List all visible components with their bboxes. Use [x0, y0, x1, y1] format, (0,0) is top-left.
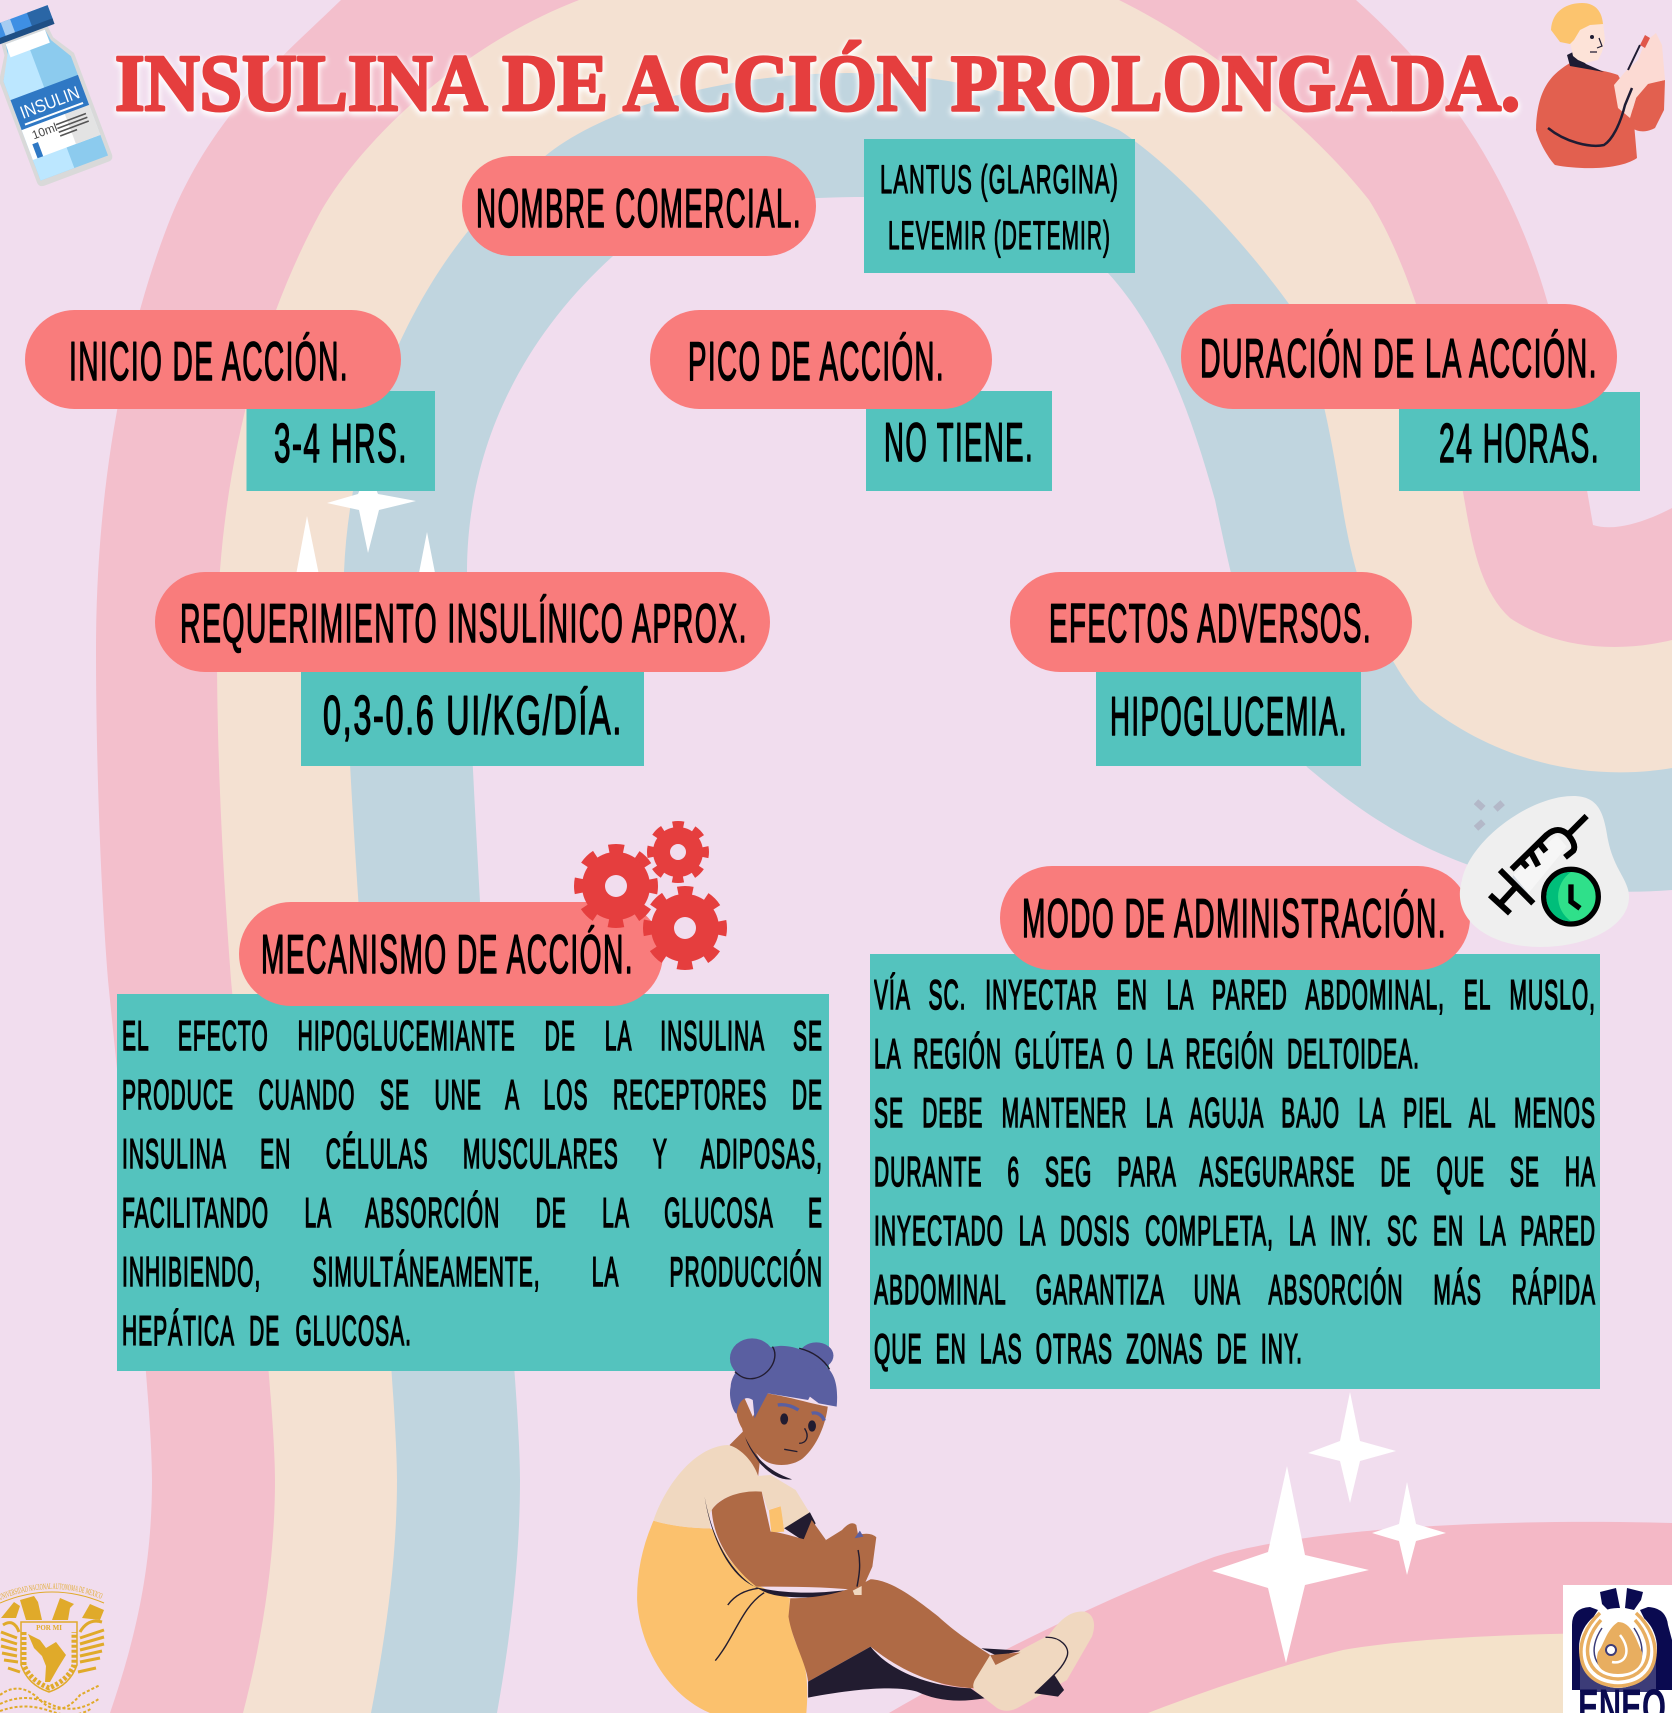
icon: insulin vial: 10ml	[30, 120, 59, 142]
text block: modo	[874, 960, 1604, 1384]
text block: mecanismo: FACILITANDO LA ABSORCIÓN DE LA GLUCOSA E	[122, 1189, 823, 1236]
panel: inicio de acción	[25, 310, 435, 491]
panel: modo de administración	[870, 866, 1604, 1389]
sparkles lower right	[1212, 1392, 1446, 1663]
text block: modo: QUE EN LAS OTRAS ZONAS DE INY.	[874, 1325, 1303, 1372]
text block: modo: INYECTADO LA DOSIS COMPLETA, LA INY. SC EN LA PARED	[874, 1207, 1596, 1254]
text block: modo: ABDOMINAL GARANTIZA UNA ABSORCIÓN MÁS RÁPIDA	[874, 1266, 1596, 1313]
panel: requerimiento insulínico	[155, 572, 770, 766]
panel: inicio de acción: 3-4 HRS.	[274, 412, 408, 474]
panel: pico de acción: PICO DE ACCIÓN.	[688, 330, 945, 392]
panel: requerimiento insulínico: REQUERIMIENTO INSULÍNICO APROX.	[180, 592, 748, 654]
illustration: sitting girl	[637, 1338, 1094, 1713]
panel: pico de acción	[650, 310, 1052, 491]
panel: requerimiento insulínico: 0,3-0.6 UI/KG/DÍA.	[323, 684, 623, 746]
text block: mecanismo: HEPÁTICA DE GLUCOSA.	[122, 1307, 412, 1354]
text block: modo: VÍA SC. INYECTAR EN LA PARED ABDOMINAL, EL MUSLO,	[874, 971, 1596, 1018]
logo: UNAM shield	[0, 1583, 104, 1713]
panel: nombre comercial: LEVEMIR (DETEMIR)	[888, 214, 1111, 258]
panel: efectos adversos: EFECTOS ADVERSOS.	[1049, 592, 1372, 654]
text block: modo: LA REGIÓN GLÚTEA O LA REGIÓN DELTOIDEA.	[874, 1030, 1420, 1077]
title: INSULINA DE ACCIÓN PROLONGADA.	[115, 40, 1520, 128]
text block: mecanismo: INHIBIENDO, SIMULTÁNEAMENTE, LA PRODUCCIÓN	[122, 1248, 823, 1295]
text block: mecanismo: EL EFECTO HIPOGLUCEMIANTE DE LA INSULINA SE	[122, 1012, 823, 1059]
panel: efectos adversos: HIPOGLUCEMIA.	[1110, 685, 1348, 747]
panel: mecanismo de acción	[117, 902, 832, 1371]
icon: syringe with clock	[1460, 796, 1629, 947]
text block: modo: DURANTE 6 SEG PARA ASEGURARSE DE QUE SE HA	[874, 1148, 1596, 1195]
icon: man with insulin pen	[1536, 3, 1665, 168]
logo: UNAM shield: UNIVERSIDAD NACIONAL AUTONOMA DE MEXICO	[0, 1583, 102, 1600]
panel: pico de acción: NO TIENE.	[884, 411, 1034, 473]
panel: nombre comercial: NOMBRE COMERCIAL.	[476, 177, 802, 239]
text block: mecanismo: INSULINA EN CÉLULAS MUSCULARES Y ADIPOSAS,	[122, 1130, 823, 1177]
text block: modo: SE DEBE MANTENER LA AGUJA BAJO LA PIEL AL MENOS	[874, 1089, 1596, 1136]
icon: insulin vial: INSULIN	[17, 82, 82, 123]
logo: UNAM shield: POR MI	[36, 1624, 62, 1632]
panel: inicio de acción: INICIO DE ACCIÓN.	[69, 330, 349, 392]
panel: nombre comercial	[462, 139, 1135, 273]
text block: mecanismo: PRODUCE CUANDO SE UNE A LOS RECEPTORES DE	[122, 1071, 823, 1118]
sparkles behind panels	[270, 470, 450, 705]
text block: mecanismo	[122, 1000, 832, 1365]
panel: efectos adversos	[1010, 572, 1412, 766]
logo: ENEO	[1563, 1585, 1672, 1713]
icon: insulin vial	[0, 2, 114, 188]
panel: mecanismo de acción: MECANISMO DE ACCIÓN.	[261, 923, 634, 985]
panel: nombre comercial: LANTUS (GLARGINA)	[880, 158, 1119, 202]
panel: duración de la acción	[1181, 304, 1640, 491]
icon: gears	[578, 824, 722, 966]
